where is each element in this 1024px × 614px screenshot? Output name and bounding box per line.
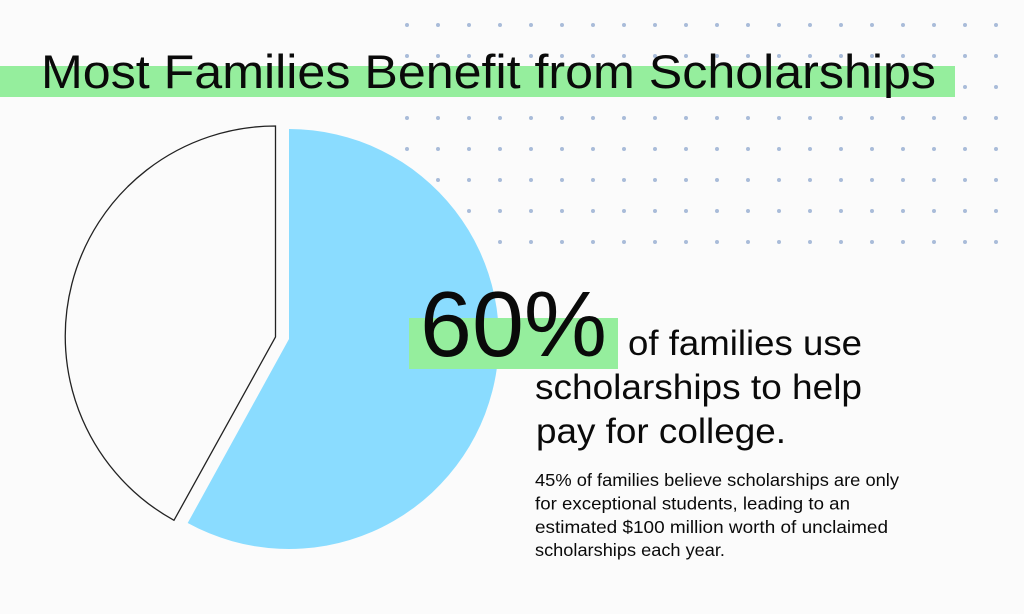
title: Most Families Benefit from Scholarships xyxy=(41,45,936,98)
main statement xyxy=(535,324,862,451)
supporting paragraph: 45% of families believe scholarships are only xyxy=(535,470,899,490)
pie slice: 60 percent xyxy=(188,129,499,549)
supporting paragraph: scholarships each year. xyxy=(535,540,725,560)
main statement: pay for college. xyxy=(536,412,786,451)
main statement: of families use xyxy=(628,324,862,363)
supporting paragraph: for exceptional students, leading to an xyxy=(535,494,850,514)
big statistic: 60% xyxy=(420,272,607,376)
title highlight bar xyxy=(0,66,955,97)
60 percent highlight bar xyxy=(409,318,618,369)
supporting paragraph xyxy=(535,470,899,560)
pie slice: 40 percent outline xyxy=(65,126,276,520)
pie chart xyxy=(65,126,499,549)
supporting paragraph: estimated $100 million worth of unclaimed xyxy=(535,517,888,537)
main statement: scholarships to help xyxy=(535,368,862,407)
